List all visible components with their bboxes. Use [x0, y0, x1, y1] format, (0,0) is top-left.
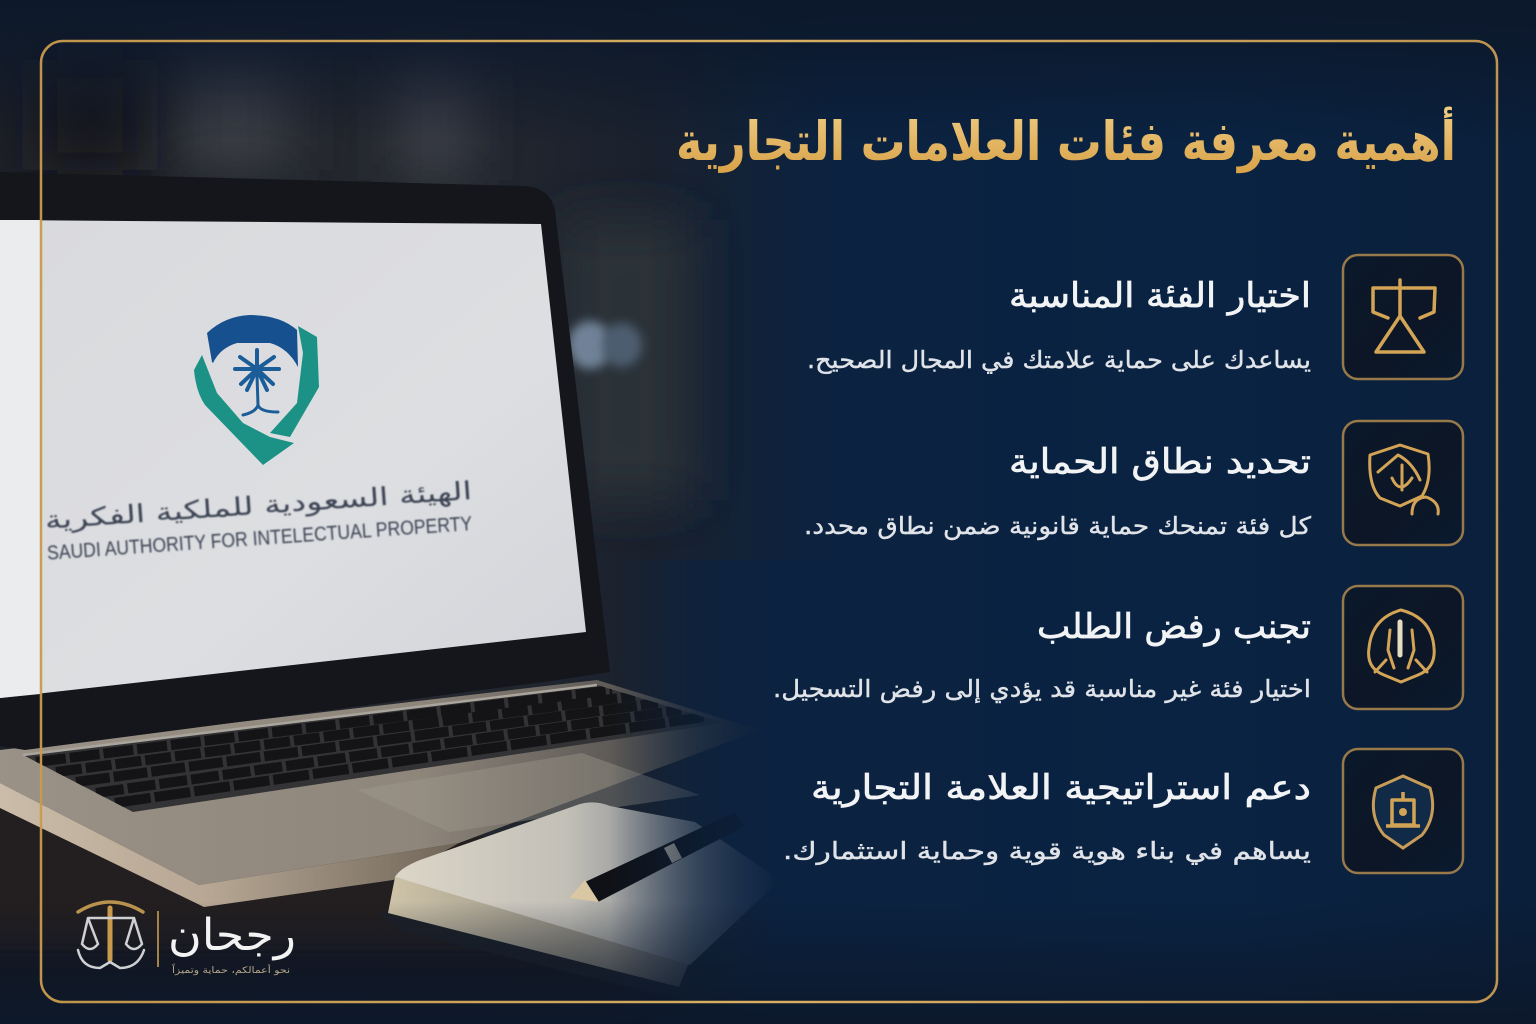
item 2 heading: تحديد نطاق الحماية	[1009, 442, 1311, 482]
palm	[235, 350, 279, 415]
item 3 description: اختيار فئة غير مناسبة قد يؤدي إلى رفض التسجيل.	[773, 675, 1311, 704]
item 2 description: كل فئة تمنحك حماية قانونية ضمن نطاق محدد.	[804, 512, 1312, 540]
brand logo	[78, 902, 296, 976]
item 1	[807, 255, 1463, 379]
brand scales emblem	[78, 902, 144, 968]
notebook	[378, 802, 800, 1000]
base front lip	[0, 783, 459, 907]
item 4	[783, 749, 1463, 873]
logo on screen: organisation name: الهيئة السعودية للملكية الفكرية	[44, 476, 473, 536]
brand tagline: نحو أعمالكم، حماية وتميزاً	[171, 963, 290, 976]
fade	[610, 560, 860, 1024]
brand name: رجحان	[168, 910, 296, 961]
laptop screen	[0, 220, 586, 698]
photo: laptop on desk	[0, 172, 771, 987]
laptop lid	[0, 172, 610, 750]
desk	[0, 790, 800, 1024]
icon box: shield with magnifier	[1343, 421, 1463, 545]
item 1 description: يساعدك على حماية علامتك في المجال الصحيح.	[807, 346, 1311, 374]
laptop base	[0, 680, 760, 885]
keyboard	[23, 685, 724, 812]
item 3 heading: تجنب رفض الطلب	[1037, 607, 1311, 647]
icon box: shield	[1343, 749, 1463, 873]
logo on screen: shield	[194, 315, 319, 465]
logo on screen: organisation name	[44, 476, 475, 565]
icon box: emblem	[1343, 586, 1463, 709]
pen	[569, 812, 745, 902]
item 2	[804, 421, 1463, 545]
logo on screen: organisation name: SAUDI AUTHORITY FOR INTELECTUAL PROPERTY	[46, 513, 473, 565]
trackpad	[357, 753, 700, 832]
icon box: scales	[1343, 255, 1463, 379]
item 4 heading: دعم استراتيجية العلامة التجارية	[811, 768, 1311, 808]
brand divider	[157, 911, 159, 967]
item 1 heading: اختيار الفئة المناسبة	[1009, 276, 1311, 316]
item 4 description: يساهم في بناء هوية قوية وحماية استثمارك.	[783, 837, 1311, 865]
item 3	[773, 586, 1463, 709]
